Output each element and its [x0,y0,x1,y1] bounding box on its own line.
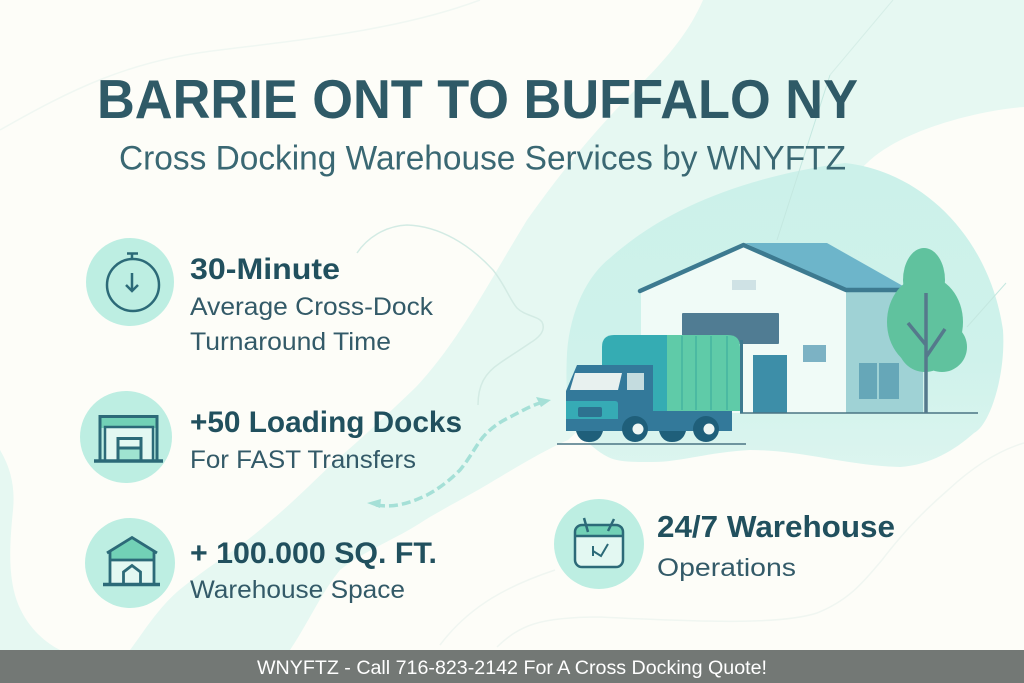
heading: 24/7: 24/7 Warehouse [657,510,895,544]
roof [745,243,910,290]
truck [557,335,746,444]
arrow: dashed route [367,397,551,508]
door [753,355,787,413]
side wall [846,290,923,413]
small window [803,345,826,362]
heading: square feet: + 100.000 SQ. FT. [190,537,437,570]
ground line [740,412,978,414]
windshield [570,373,622,390]
stat: 24/7 [554,499,895,589]
subtitle: Cross Docking Warehouse Services by WNYFTZ [119,140,846,178]
cargo box [602,335,667,413]
text: fast transfers: For FAST Transfers [190,446,416,474]
wheels [576,431,686,442]
footer text: WNYFTZ - Call 716-823-2142 For A Cross Docking Quote! [257,658,767,679]
roof edge [640,245,905,291]
text: turnaround: Turnaround Time [190,328,391,356]
warehouse wall [641,245,846,413]
heading: loading docks: +50 Loading Docks [190,406,462,439]
heading: 30-minute: 30-Minute [190,253,340,286]
icon: stopwatch [86,238,174,326]
footer bar [0,650,1024,683]
icon: loading dock [80,391,172,483]
stat: loading docks [80,391,462,483]
text: warehouse space: Warehouse Space [190,576,405,604]
upper window [732,280,756,290]
thin contour line [357,225,543,405]
dock door [682,313,779,344]
tree [887,248,967,413]
stat: warehouse space [85,518,437,608]
cab window [627,373,644,390]
grille [566,401,618,419]
icon: calendar [554,499,644,589]
blob behind warehouse [566,163,1003,467]
stat: 30-minute [86,238,434,356]
side windows [859,363,877,399]
cab [566,365,653,431]
text: turnaround: Average Cross-Dock [190,293,434,321]
illustration: warehouse and truck [557,243,978,444]
chassis [652,411,732,431]
title: BARRIE ONT TO BUFFALO NY [97,69,858,130]
icon: warehouse [85,518,175,608]
text: operations: Operations [657,554,796,582]
